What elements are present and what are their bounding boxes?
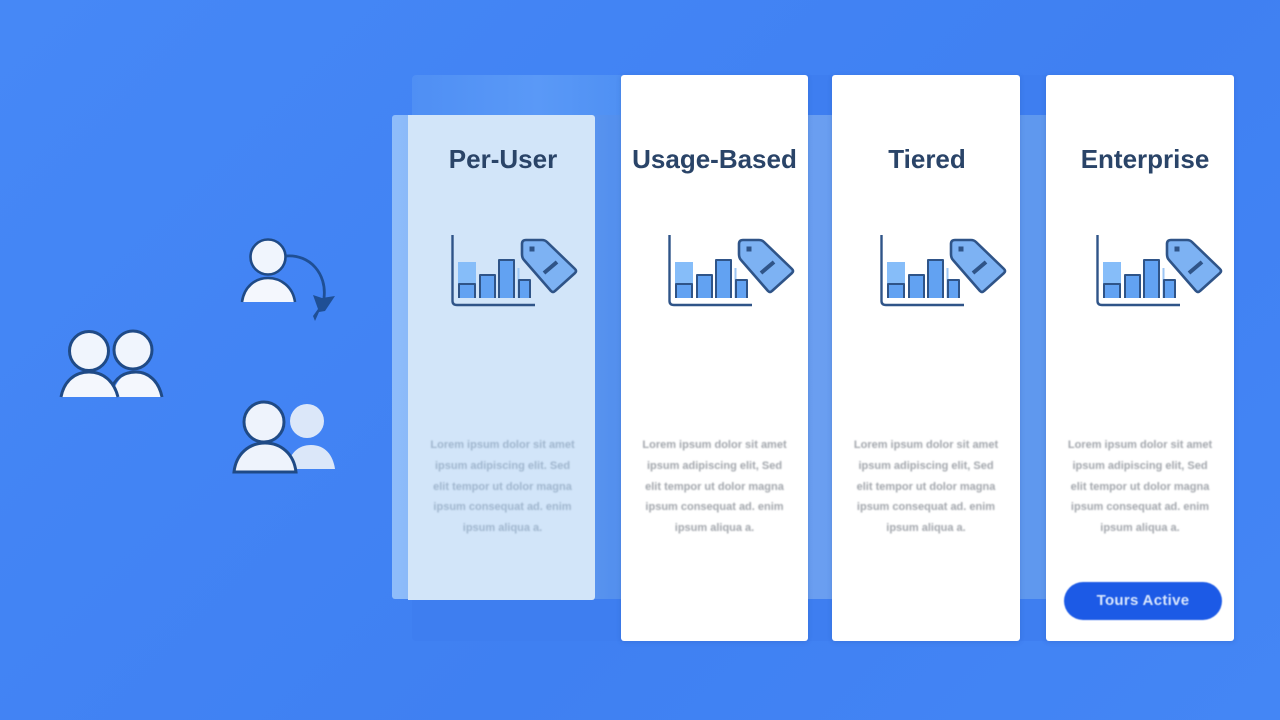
text block: Per-User: ipsum aliqua a.	[463, 522, 542, 534]
text block: Per-User	[430, 439, 575, 534]
text block: Tiered: ipsum adipiscing elit, Sed	[858, 460, 994, 472]
icon: chart and price tag, Enterprise	[1098, 235, 1221, 305]
text block: Enterprise: ipsum aliqua a.	[1100, 522, 1180, 534]
panel: Usage-Based	[621, 75, 808, 641]
text block: Usage-Based	[642, 439, 787, 534]
back panel top highlight	[412, 75, 622, 115]
text block: Enterprise: elit tempor ut dolor magna	[1071, 481, 1209, 493]
text block: Usage-Based: Lorem ipsum dolor sit amet	[642, 439, 787, 451]
text block: Per-User: Lorem ipsum dolor sit amet	[430, 439, 575, 451]
text block: Enterprise	[1068, 439, 1212, 534]
heading: Usage-Based: Usage-Based	[632, 144, 797, 174]
panel: Enterprise	[1046, 75, 1234, 641]
icon: two users, left	[61, 331, 162, 397]
icon: two users, one faded	[234, 402, 335, 472]
text block: Tiered: ipsum consequat ad. enim	[857, 501, 995, 513]
middle band	[392, 115, 1234, 599]
text block: Tiered: elit tempor ut dolor magna	[857, 481, 995, 493]
panel: Per-User	[408, 115, 595, 600]
heading: Tiered: Tiered	[888, 144, 966, 174]
button: Tours Active	[1097, 592, 1189, 609]
text block: Per-User: ipsum consequat ad. enim	[433, 501, 572, 513]
icon: chart and price tag, Per-User	[452, 235, 576, 305]
text block: Enterprise: ipsum adipiscing elit, Sed	[1072, 460, 1208, 472]
text block: Enterprise: ipsum consequat ad. enim	[1071, 501, 1209, 513]
text block: Tiered: Lorem ipsum dolor sit amet	[854, 439, 998, 451]
back panel	[412, 75, 1052, 641]
text block: Tiered: ipsum aliqua a.	[886, 522, 966, 534]
arrow	[286, 256, 335, 321]
panel: Tiered	[832, 75, 1020, 641]
heading: Per-User: Per-User	[449, 144, 557, 174]
icon: single user with arrow	[242, 240, 335, 321]
button	[1064, 582, 1222, 620]
text block: Per-User: elit tempor ut dolor magna	[433, 481, 572, 493]
text block: Usage-Based: ipsum adipiscing elit, Sed	[647, 460, 782, 472]
text block: Usage-Based: ipsum consequat ad. enim	[645, 501, 784, 513]
icon: chart and price tag, Tiered	[882, 235, 1005, 305]
heading: Enterprise: Enterprise	[1081, 144, 1209, 174]
text block: Enterprise: Lorem ipsum dolor sit amet	[1068, 439, 1212, 451]
text block: Usage-Based: elit tempor ut dolor magna	[645, 481, 784, 493]
text block: Per-User: ipsum adipiscing elit. Sed	[435, 460, 570, 472]
text block: Tiered	[854, 439, 998, 534]
text block: Usage-Based: ipsum aliqua a.	[675, 522, 754, 534]
icon: chart and price tag, Usage-Based	[670, 235, 793, 305]
